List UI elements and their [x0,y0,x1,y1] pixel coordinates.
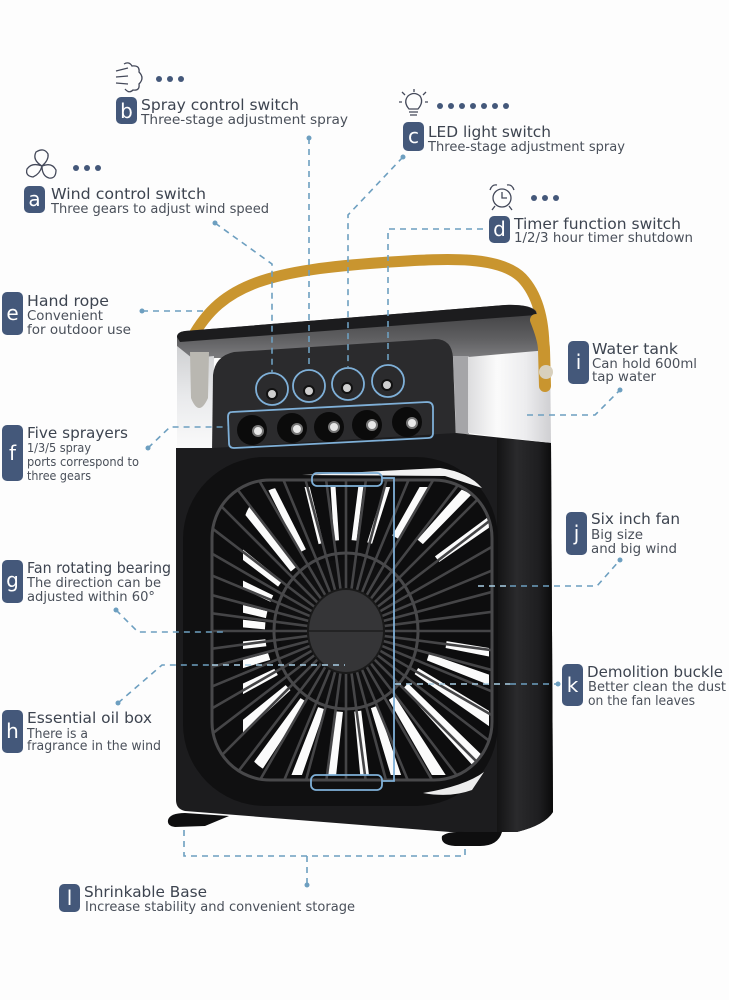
label g: fan rotating bearing [2,559,171,605]
right tank window [468,350,551,443]
label e: hand rope: Hand rope [27,292,109,310]
fan blades showing background [243,487,489,775]
label c: led light switch: Three-stage adjustment spray [427,140,625,155]
spokes [214,482,490,778]
label f: five sprayers: ports correspond to [27,455,139,469]
label l: shrinkable base: Increase stability and convenient storage [85,900,355,915]
label l: shrinkable base: Shrinkable Base [84,883,207,901]
highlight: five sprayers [228,402,433,448]
housing highlight [302,468,482,488]
icon: fan [27,150,56,178]
left tank strap [190,352,209,408]
lid dark rim [177,305,536,342]
label g: fan rotating bearing: adjusted within 60° [27,590,155,605]
label h: essential oil box: fragrance in the wind [27,739,161,754]
highlight: control buttons [256,365,404,405]
grille middle ring [274,553,418,709]
label i: water tank: tap water [592,370,657,385]
grille frame [212,480,492,780]
product: handheld cooling fan [168,254,553,846]
label k: demolition buckle [562,663,726,709]
label i: water tank: i [576,350,581,374]
label d: timer function switch: Timer function switch [513,215,681,233]
label e: hand rope [2,292,131,338]
label e: hand rope: for outdoor use [27,323,131,338]
label f: five sprayers: Five sprayers [27,424,128,442]
led level dots [437,103,509,109]
label h: essential oil box: There is a [26,727,88,742]
panel buttons [267,380,392,399]
icon: light bulb [399,89,428,115]
label j: six inch fan: j [573,521,579,545]
label c: led light switch [403,122,625,155]
strap lower end [536,320,545,386]
water tank lid [177,305,549,362]
fan hub [308,589,384,673]
label h: essential oil box: h [6,719,19,743]
control panel [212,339,456,452]
label e: hand rope: e [6,301,19,325]
label b: spray control switch: Three-stage adjustment spray [140,113,348,128]
fan housing [183,457,498,806]
leader lines [116,138,620,885]
label g: fan rotating bearing: The direction can be [26,576,161,591]
label j: six inch fan: Big size [591,528,643,543]
label j: six inch fan: Six inch fan [591,510,680,528]
label f: five sprayers: f [9,441,17,465]
side panel [497,438,553,832]
timer level dots [531,195,559,201]
label h: essential oil box [2,709,161,754]
nozzles [237,407,422,445]
label i: water tank: Water tank [592,340,678,358]
fan grille [210,478,494,782]
right tank band [453,356,469,434]
label b: spray control switch: Spray control switch [141,96,299,114]
label d: timer function switch: d [493,217,506,241]
label c: led light switch: LED light switch [428,123,551,141]
label l: shrinkable base: l [67,886,72,910]
label b: spray control switch [116,96,348,128]
label a: wind control switch: a [28,187,41,211]
icon: spray [116,63,142,92]
label k: demolition buckle: Better clean the dust [588,680,726,695]
label f: five sprayers: 1/3/5 spray [27,441,91,455]
label a: wind control switch [24,185,269,217]
inner dark zone [280,559,412,703]
label h: essential oil box: Essential oil box [27,709,152,727]
carry handle strap [192,259,544,350]
label c: led light switch: c [408,124,419,148]
label a: wind control switch: Three gears to adjust wind speed [50,202,269,217]
label l: shrinkable base [59,883,355,915]
highlight: demolition buckles [311,473,394,790]
label g: fan rotating bearing: g [6,568,19,592]
spray level dots [156,76,184,82]
icon: alarm clock [490,185,514,210]
label e: hand rope: Convenient [27,309,103,324]
wind level dots [73,165,101,171]
housing lower highlight [423,772,484,795]
label f: five sprayers: three gears [27,469,91,483]
label f: five sprayers [2,424,139,483]
label a: wind control switch: Wind control switch [51,185,206,203]
label i: water tank [568,340,697,385]
label k: demolition buckle: Demolition buckle [587,663,723,681]
feet [168,813,229,827]
label g: fan rotating bearing: Fan rotating bearing [27,559,171,577]
label b: spray control switch: b [120,99,133,123]
label i: water tank: Can hold 600ml [592,357,697,372]
leader dots [114,136,622,888]
body [176,433,553,832]
label d: timer function switch [489,215,693,246]
left tank window [177,346,214,448]
label k: demolition buckle: on the fan leaves [588,694,695,709]
label d: timer function switch: 1/2/3 hour timer shutdown [514,231,693,246]
label k: demolition buckle: k [567,673,579,697]
label j: six inch fan: and big wind [591,542,677,557]
label j: six inch fan [566,510,680,557]
strap button [539,365,553,379]
